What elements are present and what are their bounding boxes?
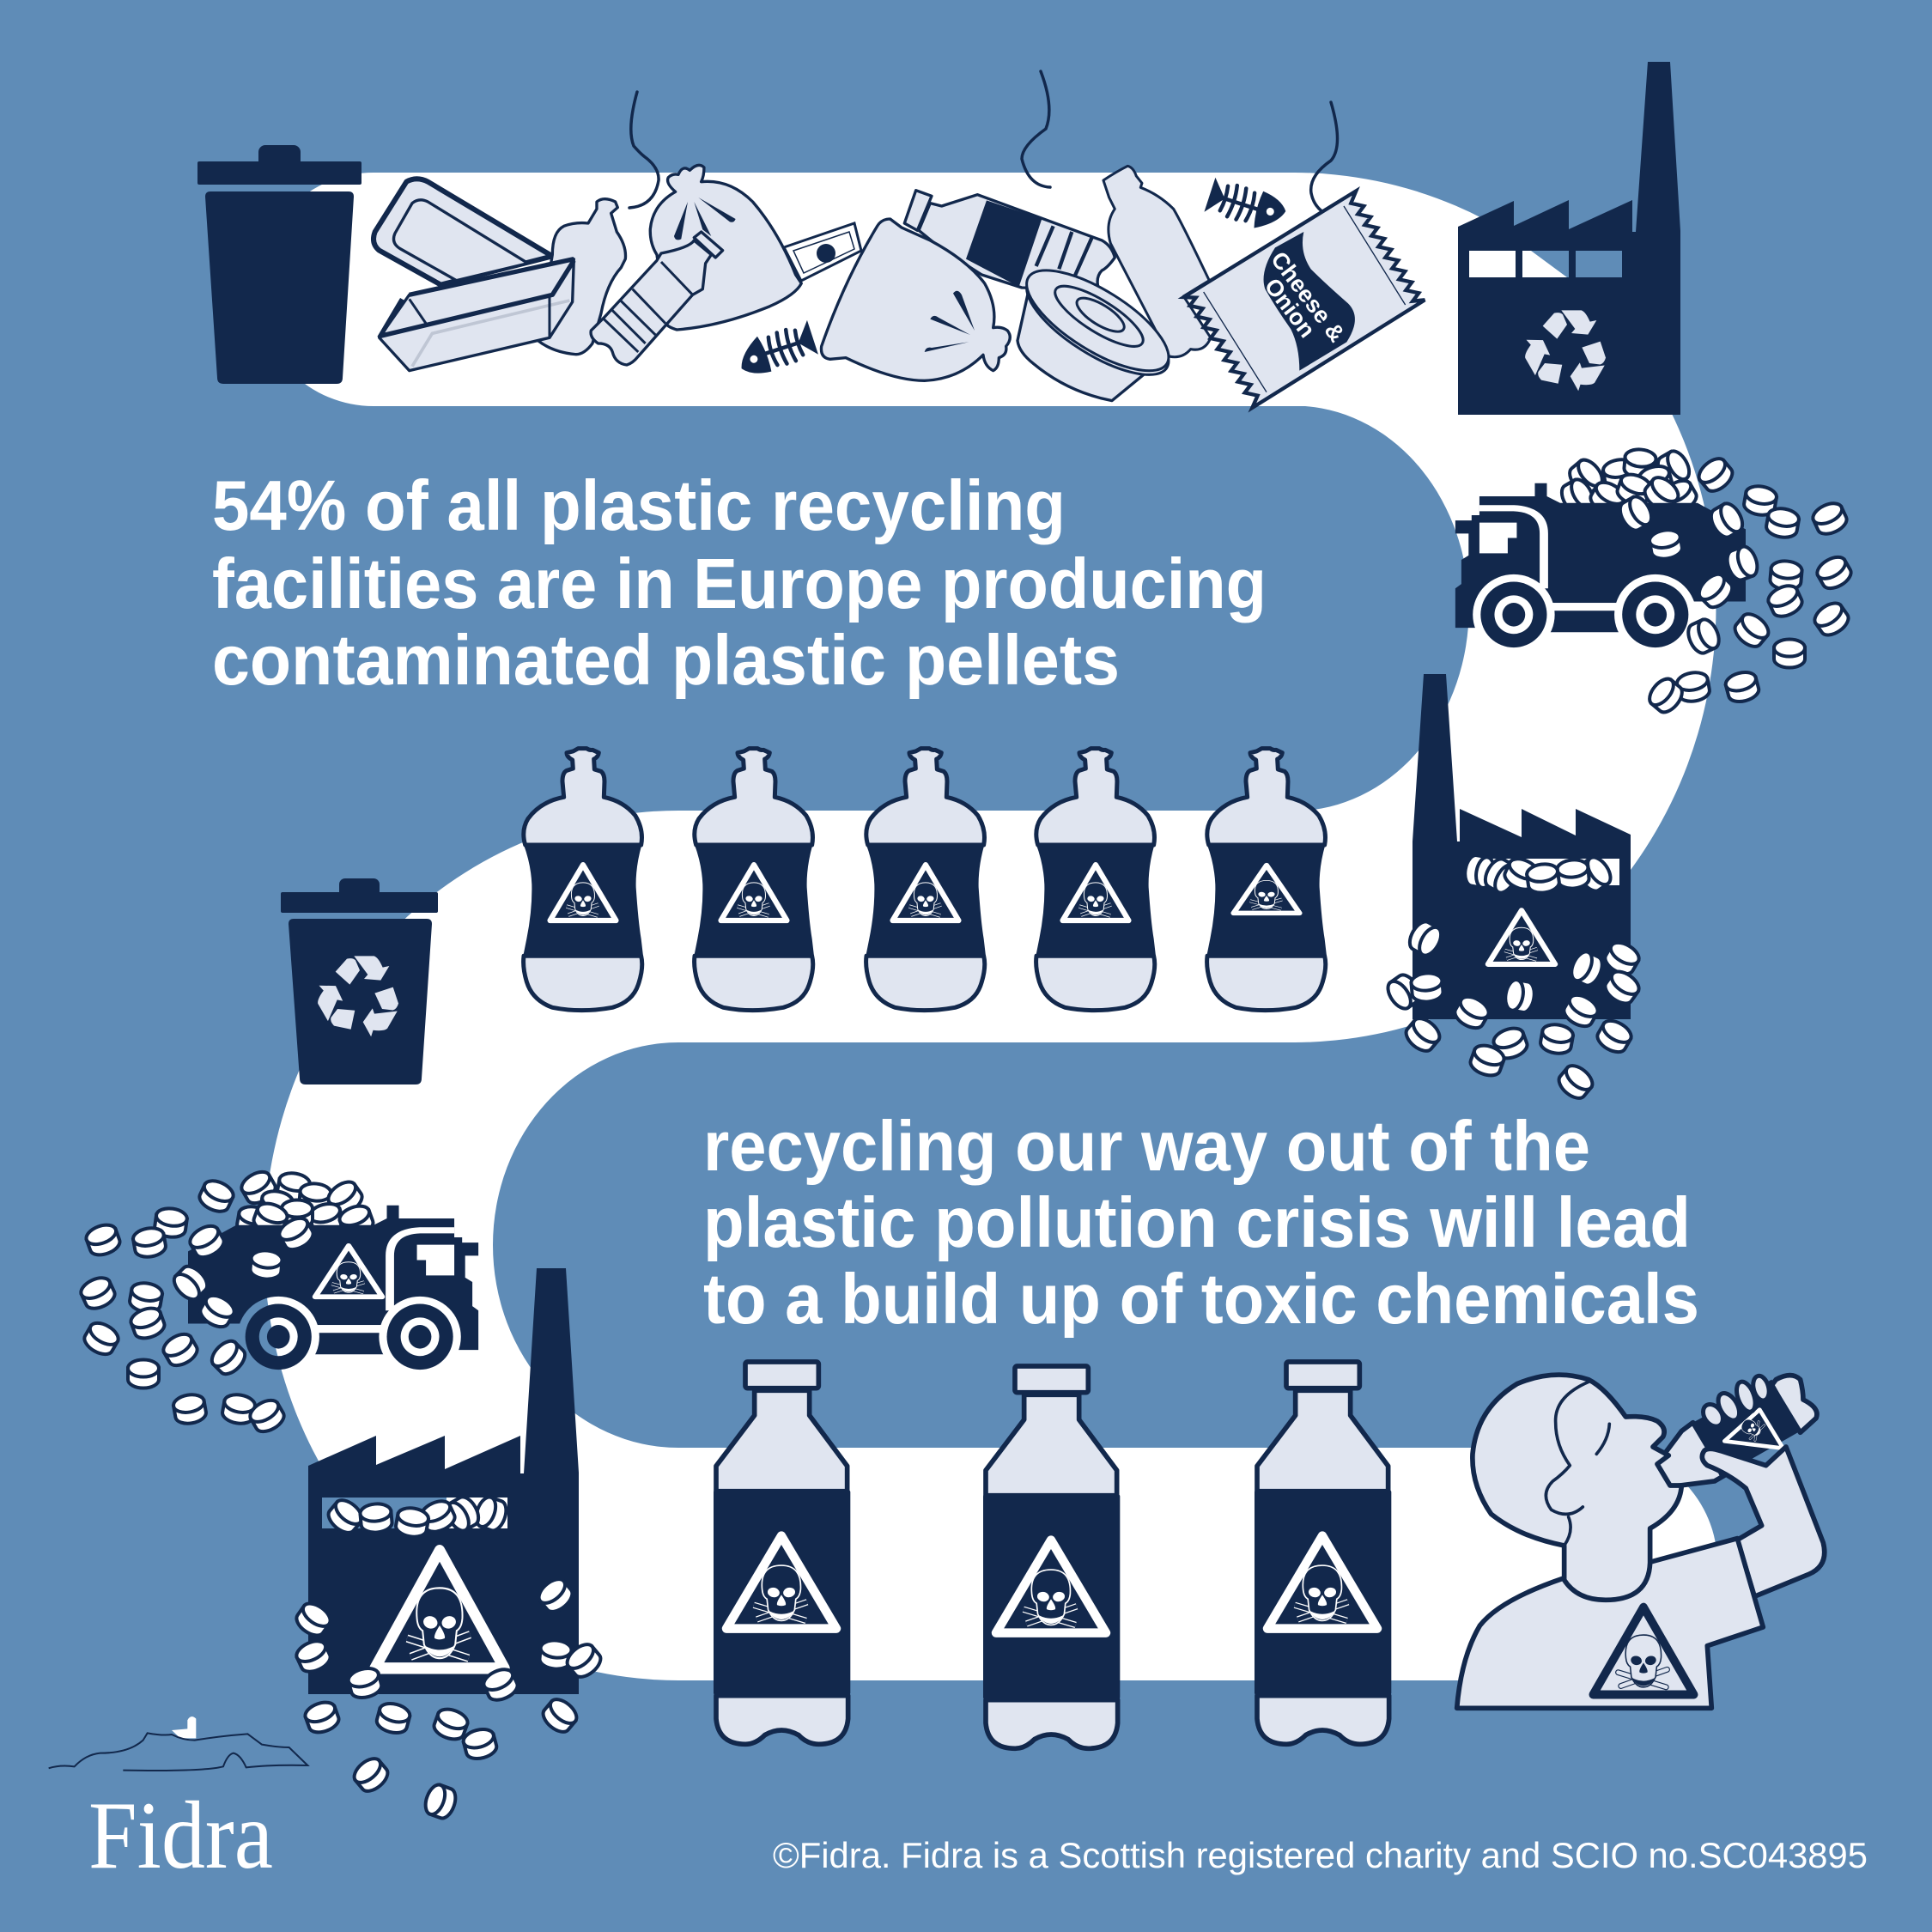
icon: waste bin: [197, 145, 361, 384]
truck body: [188, 1206, 478, 1370]
stink lines: [629, 71, 1341, 219]
forearm and hand: [1702, 1447, 1825, 1596]
toxic factory with pellets: [293, 1268, 605, 1821]
toxic truck carrying pellets: [78, 1168, 478, 1436]
drink bottle: [1656, 1374, 1817, 1487]
detergent bottle 5: [1206, 749, 1327, 1011]
row of toxic detergent bottles: [523, 749, 1327, 1011]
pellet heap: [235, 1168, 376, 1240]
detergent bottle 4: [1036, 749, 1156, 1011]
toxic recycling factory with pellets: [1383, 674, 1643, 1103]
crisp packet label line two: Onion: [1260, 273, 1321, 343]
person drinking from toxic bottle: [1457, 1374, 1825, 1708]
heading: recycling facilities: contaminated plastic pellets: [212, 620, 1120, 700]
pellets: [293, 1493, 605, 1821]
falling pellets: [1616, 454, 1855, 716]
chest hazard sign: [1593, 1607, 1694, 1695]
toxic water bottle 2: [983, 1366, 1120, 1748]
detergent bottle 2: [694, 749, 814, 1011]
illustration: mixed plastic waste: [374, 71, 1425, 408]
copyright footer: ©Fidra. Fidra is a Scottish registered charity and SCIO no.SC043895: [773, 1835, 1868, 1875]
head and neck: [1473, 1375, 1681, 1600]
crisp packet: [1184, 191, 1425, 408]
sauce sachet: [784, 223, 861, 281]
Fidra wordmark: Fidra: [88, 1783, 273, 1889]
detergent bottle 3: [866, 749, 986, 1011]
truck body: [1455, 483, 1746, 648]
toxic water bottle 1: [714, 1362, 850, 1744]
hair, ear and eye lines: [1546, 1382, 1609, 1546]
pellet heap: [1558, 447, 1700, 518]
icon: recycling factory: [1458, 62, 1680, 415]
food tray, squeezy bottle, clear container, bag and water bottle: [374, 165, 801, 371]
shirt: [1457, 1539, 1763, 1708]
heading: recycling facilities: facilities are in Europe producing: [212, 544, 1267, 623]
heading: toxic chemicals: to a build up of toxic chemicals: [703, 1259, 1699, 1339]
crisp packet label line one: Cheese &: [1266, 246, 1350, 347]
pellets: [1383, 854, 1643, 1103]
hazard sign: [315, 1246, 382, 1297]
icon: recycling bin: [281, 878, 438, 1084]
fish bone: [733, 320, 819, 380]
heading: toxic chemicals: plastic pollution crisis will lead: [703, 1182, 1691, 1262]
hazard sign: [1488, 910, 1555, 964]
falling pellets: [78, 1176, 317, 1436]
toxic water bottle 3: [1255, 1362, 1391, 1744]
Fidra lighthouse logo: [49, 1716, 307, 1771]
hazard sign: [374, 1551, 505, 1668]
truck carrying pellets: [1455, 447, 1855, 716]
winding white recycling path ribbon: [257, 173, 1717, 1680]
bottles, bag and tin: [821, 166, 1211, 401]
heading: recycling facilities: 54% of all plastic recycling: [212, 465, 1066, 545]
detergent bottle 1: [523, 749, 643, 1011]
heading: toxic chemicals: recycling our way out of the: [703, 1106, 1590, 1186]
fish bone two: [1204, 176, 1290, 236]
